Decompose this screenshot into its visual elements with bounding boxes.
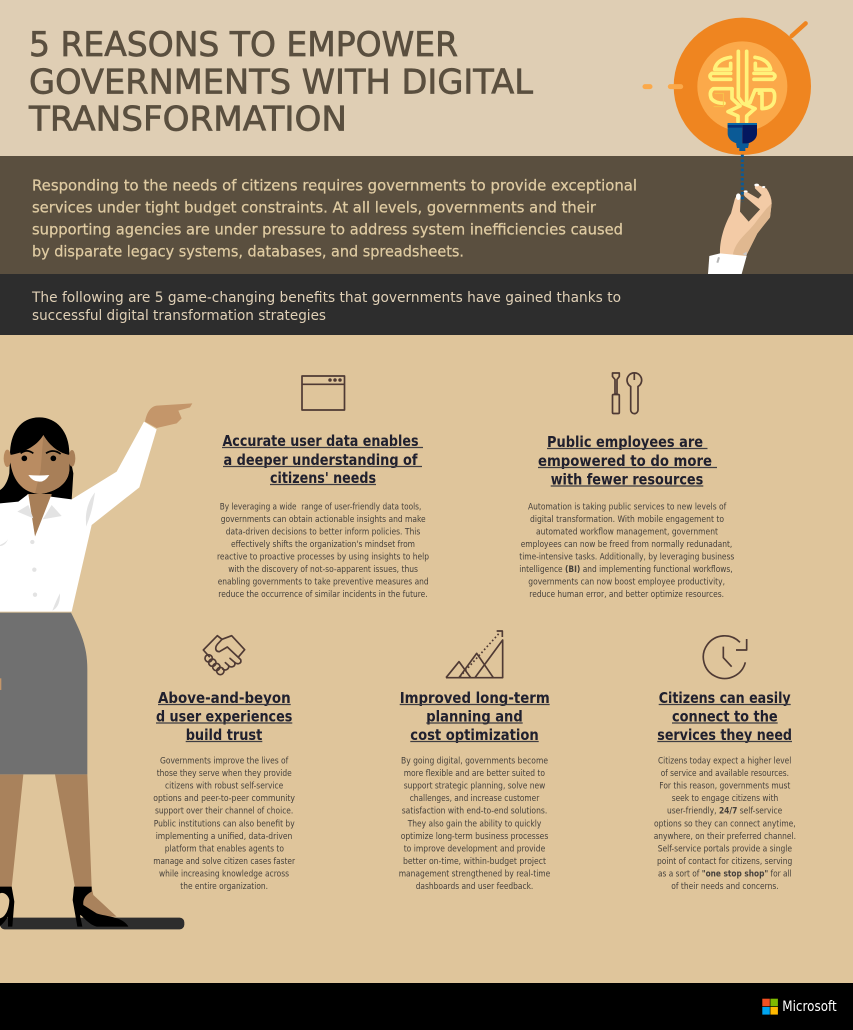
body text: platform that enables agents to [165, 844, 284, 854]
body text: reactive to proactive processes by using insights to help [217, 552, 429, 562]
icon: Microsoft logo: Microsoft [782, 999, 837, 1015]
body text [654, 756, 796, 892]
body text: time-intensive tasks. Additionally, by leveraging business [519, 552, 735, 562]
heading [156, 689, 292, 744]
body text: Automation is taking public services to new levels of [528, 502, 727, 512]
body text: satisfaction with end-to-end solutions. [402, 807, 547, 817]
icon: handshake [203, 636, 245, 675]
body text: more flexible and are better suited to [404, 769, 545, 779]
body text: enabling governments to take preventive measures and [218, 578, 429, 588]
title [28, 25, 533, 139]
icon: screwdriver and wrench [612, 373, 642, 414]
heading [657, 689, 792, 744]
card: citizens connect [654, 636, 796, 892]
body text: options so they can connect anytime, [654, 819, 796, 829]
body text: citizens with robust self-service [165, 782, 283, 792]
panel: intro band [0, 156, 853, 274]
body text: They also gain the ability to quickly [407, 819, 541, 829]
intro text: by disparate legacy systems, databases, and spreadsheets. [32, 243, 464, 261]
intro text: services under tight budget constraints. At all levels, governments and their [32, 199, 597, 217]
icon: clock with arrow [703, 636, 747, 678]
body text [153, 756, 295, 892]
body text: the entire organization. [180, 882, 268, 892]
panel: main tan background [0, 335, 853, 983]
heading: cost optimization [410, 726, 539, 744]
heading [400, 689, 550, 744]
card: accurate user data [217, 376, 429, 600]
body text: of service and available resources. [661, 769, 789, 779]
body text: support strategic planning, solve new [404, 782, 545, 792]
body text [217, 502, 429, 600]
body text: challenges, and increase customer [410, 794, 540, 804]
body text: support over their channel of choice. [155, 807, 293, 817]
title: 5 REASONS TO EMPOWER [29, 25, 458, 64]
heading [538, 433, 717, 488]
card: public employees [519, 373, 735, 600]
body text: Citizens today expect a higher level [658, 756, 791, 766]
body text: management strengthened by real-time [399, 870, 550, 880]
body text: implementing a unified, data-driven [156, 832, 292, 842]
body text: with the discovery of not-so-apparent issues, thus [228, 565, 418, 575]
body text: point of contact for citizens, serving [657, 857, 792, 867]
intro text: Responding to the needs of citizens requires governments to provide exceptional [32, 177, 637, 195]
body text: dashboards and user feedback. [416, 882, 533, 892]
body text: optimize long-term business processes [401, 832, 549, 842]
body text: user-friendly, 24/7 self-service [667, 807, 782, 817]
body text: data-driven decisions to better inform policies. This [226, 527, 421, 537]
heading: Citizens can easily [659, 689, 791, 707]
heading [222, 432, 423, 487]
body text: reduce the occurrence of similar incidents in the future. [218, 590, 428, 600]
heading: Improved long-term [400, 689, 550, 707]
body text: By leveraging a wide range of user-friendly data tools, [220, 502, 421, 512]
heading: Accurate user data enables [222, 432, 418, 450]
body text: better on-time, within-budget project [403, 857, 546, 867]
heading: d user experiences [156, 708, 292, 726]
lead-in text: successful digital transformation strategies [32, 308, 326, 324]
body text: employees can now be freed from normally redunadant, [521, 540, 732, 550]
icon: growth triangles with arrow [446, 631, 503, 678]
body text: digital transformation. With mobile engagement to [530, 515, 724, 525]
panel: header [0, 0, 853, 156]
illustration: woman pointing upper body [0, 403, 192, 612]
heading: citizens' needs [270, 469, 376, 487]
body text: effectively shifts the organization's mindset from [231, 540, 415, 550]
heading: a deeper understanding of [224, 451, 418, 469]
card: above-and-beyond experiences [153, 636, 295, 892]
heading: services they need [657, 726, 792, 744]
illustration: light bulb with brain held by hand [645, 18, 811, 274]
heading: connect to the [672, 708, 778, 726]
intro text [32, 177, 637, 261]
heading: build trust [186, 726, 262, 744]
body text: as a sort of "one stop shop" for all [658, 870, 792, 880]
intro text: supporting agencies are under pressure to address system inefficiencies caused [32, 221, 623, 239]
heading: empowered to do more [538, 452, 712, 470]
body text: intelligence (BI) and implementing functional workflows, [519, 565, 733, 575]
body text: anywhere, on their preferred channel. [654, 832, 796, 842]
body text: to improve development and provide [404, 844, 545, 854]
panel: benefits lead-in band [0, 274, 853, 335]
illustration: woman lower body and ground [0, 613, 184, 929]
heading: Above-and-beyon [158, 689, 291, 707]
lead-in text [31, 290, 621, 324]
panel: footer [0, 983, 853, 1030]
title: TRANSFORMATION [28, 100, 347, 139]
body text: governments can obtain actionable insights and make [221, 515, 426, 525]
title: GOVERNMENTS WITH DIGITAL [29, 62, 533, 101]
body text [399, 756, 550, 892]
heading: planning and [426, 708, 523, 726]
body text: Governments improve the lives of [160, 756, 289, 766]
body text: For this reason, governments must [659, 782, 791, 792]
body text: of their needs and concerns. [671, 882, 779, 892]
heading: with fewer resources [551, 470, 703, 488]
lead-in text: The following are 5 game-changing benefits that governments have gained thanks to [31, 290, 621, 306]
body text: manage and solve citizen cases faster [153, 857, 295, 867]
body text: reduce human error, and better optimize resources. [529, 590, 724, 600]
body text [519, 502, 735, 600]
icon: Microsoft logo [762, 999, 837, 1015]
body text: By going digital, governments become [401, 756, 548, 766]
heading: Public employees are [547, 433, 703, 451]
body text: governments can now boost employee productivity, [528, 578, 725, 588]
card: long-term planning [399, 631, 550, 892]
body text: those they serve when they provide [157, 769, 292, 779]
body text: Self-service portals provide a single [658, 844, 792, 854]
body text: Public institutions can also benefit by [154, 819, 295, 829]
body text: seek to engage citizens with [672, 794, 778, 804]
body text: automated workflow management, government [536, 527, 718, 537]
body text: options and peer-to-peer community [153, 794, 295, 804]
body text: while increasing knowledge across [159, 870, 289, 880]
icon: browser window [302, 376, 344, 410]
